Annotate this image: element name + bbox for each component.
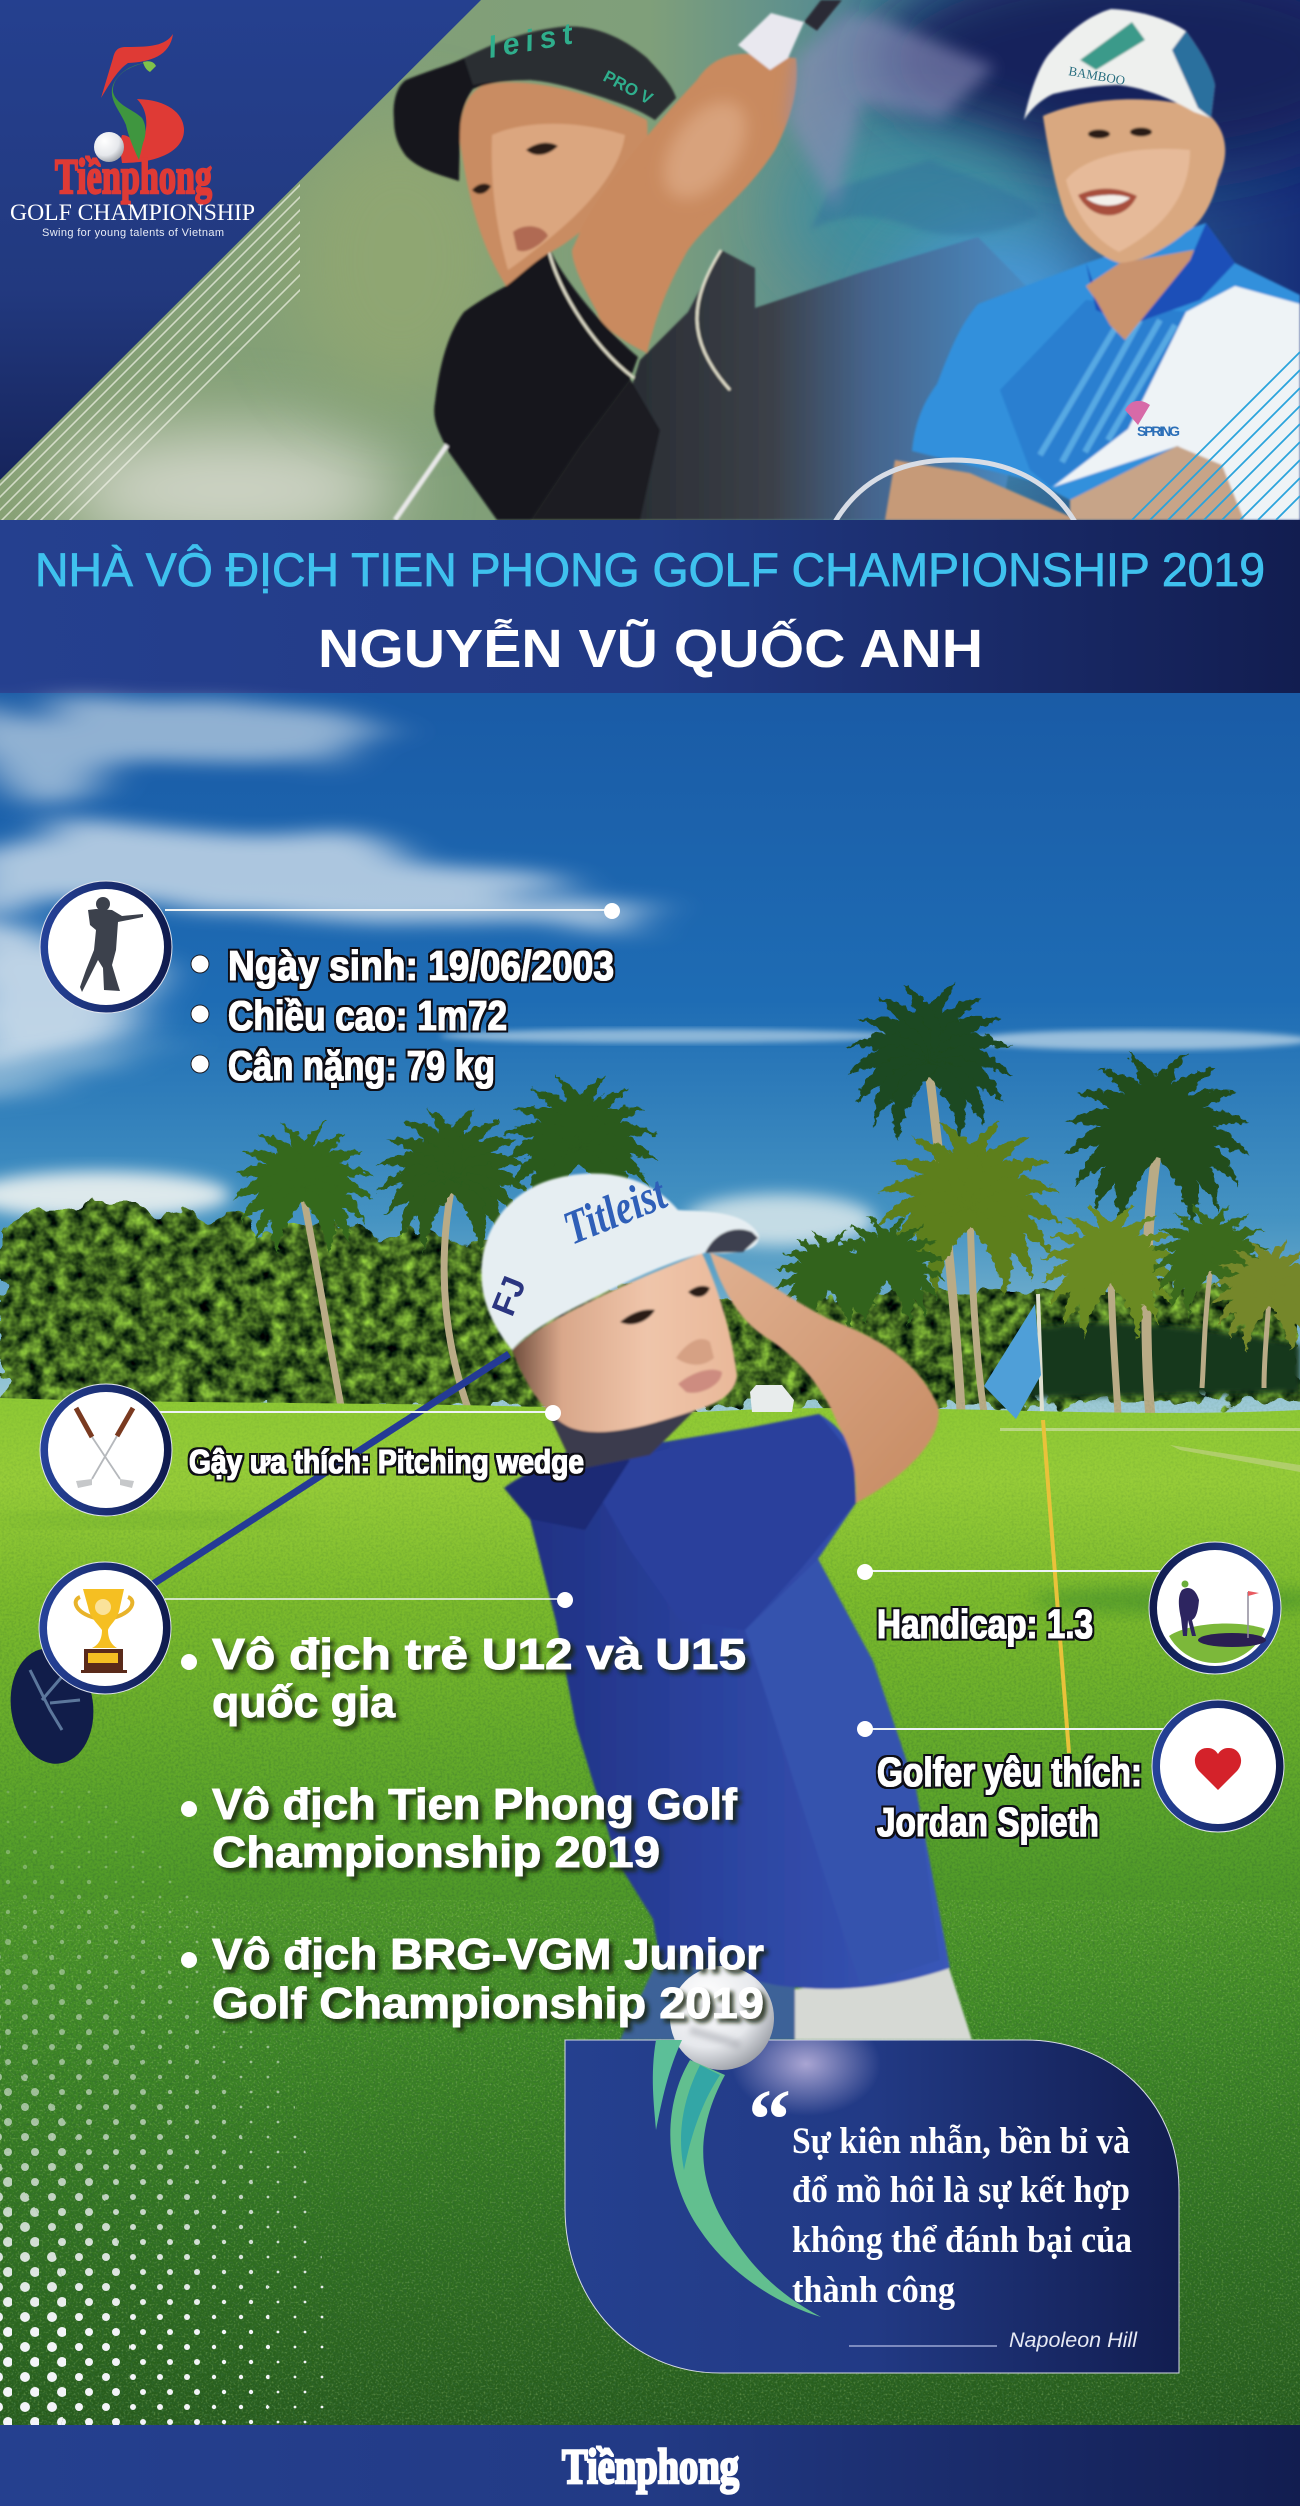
logo: Tien Phong Golf Championship xyxy=(10,34,255,239)
quote text: đổ mồ hôi là sự kết hợp xyxy=(792,2170,1130,2211)
driver club xyxy=(3,1354,509,1769)
golfer in blue and white shirt: BAMBOO xyxy=(1067,63,1126,88)
main golfer: Titleist xyxy=(556,1166,675,1255)
achievement list: Vô địch Tien Phong Golf xyxy=(212,1780,737,1829)
icon: trophy xyxy=(39,1562,171,1694)
achievement list: Golf Championship 2019 xyxy=(212,1979,764,2028)
sky xyxy=(0,693,1300,1423)
bullet list: Ngày sinh: 19/06/2003 xyxy=(228,942,614,989)
achievement list xyxy=(181,1630,764,2028)
cap logos: leist xyxy=(485,17,577,65)
main golfer: FJ xyxy=(484,1271,533,1321)
face xyxy=(512,1253,737,1432)
shirt xyxy=(504,1414,950,1989)
icon: heart xyxy=(1152,1700,1284,1832)
halftone dots xyxy=(0,1780,350,2425)
quote text: Sự kiên nhẫn, bền bỉ và xyxy=(792,2121,1130,2162)
golfer in blue and white shirt xyxy=(885,9,1300,520)
quote text: thành công xyxy=(792,2270,955,2311)
world map decoration xyxy=(810,160,1040,235)
favourite golfer block xyxy=(857,1700,1284,1845)
achievements block xyxy=(39,1562,764,2028)
heading: player name: NGUYỄN VŨ QUỐC ANH xyxy=(318,618,983,679)
author: Napoleon Hill xyxy=(1009,2329,1138,2352)
footer band xyxy=(0,2425,1300,2506)
quote mark: “ xyxy=(748,2071,791,2167)
golfer in black shirt: PRO V xyxy=(600,67,656,109)
golf ball xyxy=(670,1966,774,2070)
bullet list xyxy=(191,942,614,1089)
main golfer xyxy=(481,1166,972,2040)
handicap block xyxy=(857,1542,1281,1674)
cap xyxy=(481,1173,759,1350)
swoosh xyxy=(653,2040,821,2317)
handicap block: Handicap: 1.3 xyxy=(877,1601,1093,1647)
favourite golfer block: Golfer yêu thích: xyxy=(877,1749,1142,1795)
navy triangle corner xyxy=(0,0,481,480)
personal info block xyxy=(40,881,620,1089)
achievement list: Vô địch trẻ U12 và U15 xyxy=(212,1630,746,1679)
title band xyxy=(0,520,1300,693)
icon: golfer silhouette xyxy=(40,881,172,1013)
logo: Tien Phong Golf Championship: Swing for young talents of Vietnam xyxy=(42,227,224,239)
neck xyxy=(542,1400,700,1470)
achievement list: Championship 2019 xyxy=(212,1828,660,1877)
white arc xyxy=(835,460,1075,522)
favourite club block xyxy=(40,1384,584,1516)
hero photo banner xyxy=(0,0,1300,520)
icon: crossed clubs xyxy=(40,1384,172,1516)
arm xyxy=(710,1253,939,1503)
logo: Tien Phong Golf Championship: Tiềnphong xyxy=(55,148,212,204)
bullet list: Cân nặng: 79 kg xyxy=(228,1042,495,1089)
logo: Tien Phong Golf Championship: GOLF CHAMPIONSHIP xyxy=(10,200,255,225)
favourite golfer block: Jordan Spieth xyxy=(877,1799,1099,1845)
palm trees xyxy=(232,978,1300,1446)
trousers xyxy=(790,1968,972,2040)
fairway grass xyxy=(0,1398,1300,2430)
white car xyxy=(750,1385,794,1412)
golfer in blue and white shirt: SPRING xyxy=(1137,423,1180,439)
footer logo: Tiềnphong xyxy=(562,2438,739,2494)
achievement list: Vô địch BRG-VGM Junior xyxy=(212,1930,764,1979)
heading: championship: NHÀ VÔ ĐỊCH TIEN PHONG GOLF CHAMPIONSHIP 2019 xyxy=(35,543,1265,596)
quote panel xyxy=(565,1966,1179,2373)
golfer in black shirt xyxy=(394,0,1040,520)
tree line xyxy=(0,1202,1300,1412)
quote text xyxy=(792,2121,1132,2311)
icon: putting green xyxy=(1149,1542,1281,1674)
achievement list: quốc gia xyxy=(212,1678,396,1727)
favourite club block: Gậy ưa thích: Pitching wedge xyxy=(189,1443,584,1480)
diagonal white lines xyxy=(0,184,300,520)
connector line xyxy=(165,903,620,919)
quote text: không thể đánh bại của xyxy=(792,2220,1132,2261)
flag and pole xyxy=(984,1294,1069,1753)
diagonal blue lines xyxy=(1132,352,1300,520)
bullet list: Chiều cao: 1m72 xyxy=(228,992,507,1039)
light glow xyxy=(736,2040,876,2113)
